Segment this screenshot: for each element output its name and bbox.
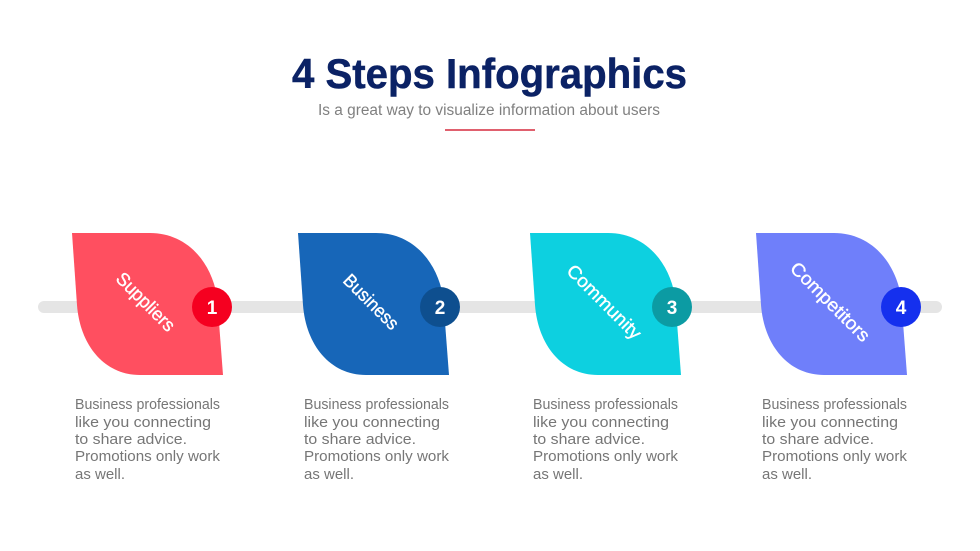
body text 4: to share advice.: [762, 432, 874, 448]
body text 3: as well.: [533, 467, 583, 483]
body text 4: [762, 397, 908, 483]
label: Community: Community: [563, 260, 647, 344]
body text 3: like you connecting: [533, 415, 669, 431]
body text 1: Business professionals: [75, 397, 220, 413]
body text 2: [304, 397, 450, 483]
body text 3: Promotions only work: [533, 449, 679, 465]
number badge 1: 1: [207, 298, 218, 319]
leaf shape 3: [530, 233, 681, 375]
label: Business: Business: [339, 269, 404, 334]
body text 1: like you connecting: [75, 415, 211, 431]
timeline track: [38, 301, 942, 313]
number badge 3: [652, 287, 692, 327]
body text 2: Promotions only work: [304, 449, 450, 465]
label: Suppliers: Suppliers: [112, 268, 180, 336]
body text 1: as well.: [75, 467, 125, 483]
number badge 2: [420, 287, 460, 327]
label: Competitors: Competitors: [786, 257, 875, 346]
panel: step 4: [756, 233, 921, 483]
panel: step 1: [72, 233, 232, 483]
body text 2: Business professionals: [304, 397, 449, 413]
body text 1: to share advice.: [75, 432, 187, 448]
number badge 2: 2: [435, 298, 445, 319]
number badge 3: 3: [667, 298, 677, 319]
subtitle: Is a great way to visualize information about users: [318, 102, 660, 119]
leaf shape 1: [72, 233, 223, 375]
body text 2: like you connecting: [304, 415, 440, 431]
panel: step 2: [298, 233, 460, 483]
body text 2: as well.: [304, 467, 354, 483]
body text 4: like you connecting: [762, 415, 898, 431]
title: 4 Steps Infographics: [292, 50, 687, 97]
body text 3: Business professionals: [533, 397, 678, 413]
body text 4: as well.: [762, 467, 812, 483]
title underline: [445, 129, 535, 131]
body text 1: Promotions only work: [75, 449, 221, 465]
leaf shape 2: [298, 233, 449, 375]
number badge 4: [881, 287, 921, 327]
body text 1: [75, 397, 221, 483]
number badge 4: 4: [896, 298, 907, 319]
leaf shape 4: [756, 233, 907, 375]
body text 2: to share advice.: [304, 432, 416, 448]
body text 3: [533, 397, 679, 483]
body text 4: Promotions only work: [762, 449, 908, 465]
body text 4: Business professionals: [762, 397, 907, 413]
body text 3: to share advice.: [533, 432, 645, 448]
number badge 1: [192, 287, 232, 327]
panel: step 3: [530, 233, 692, 483]
